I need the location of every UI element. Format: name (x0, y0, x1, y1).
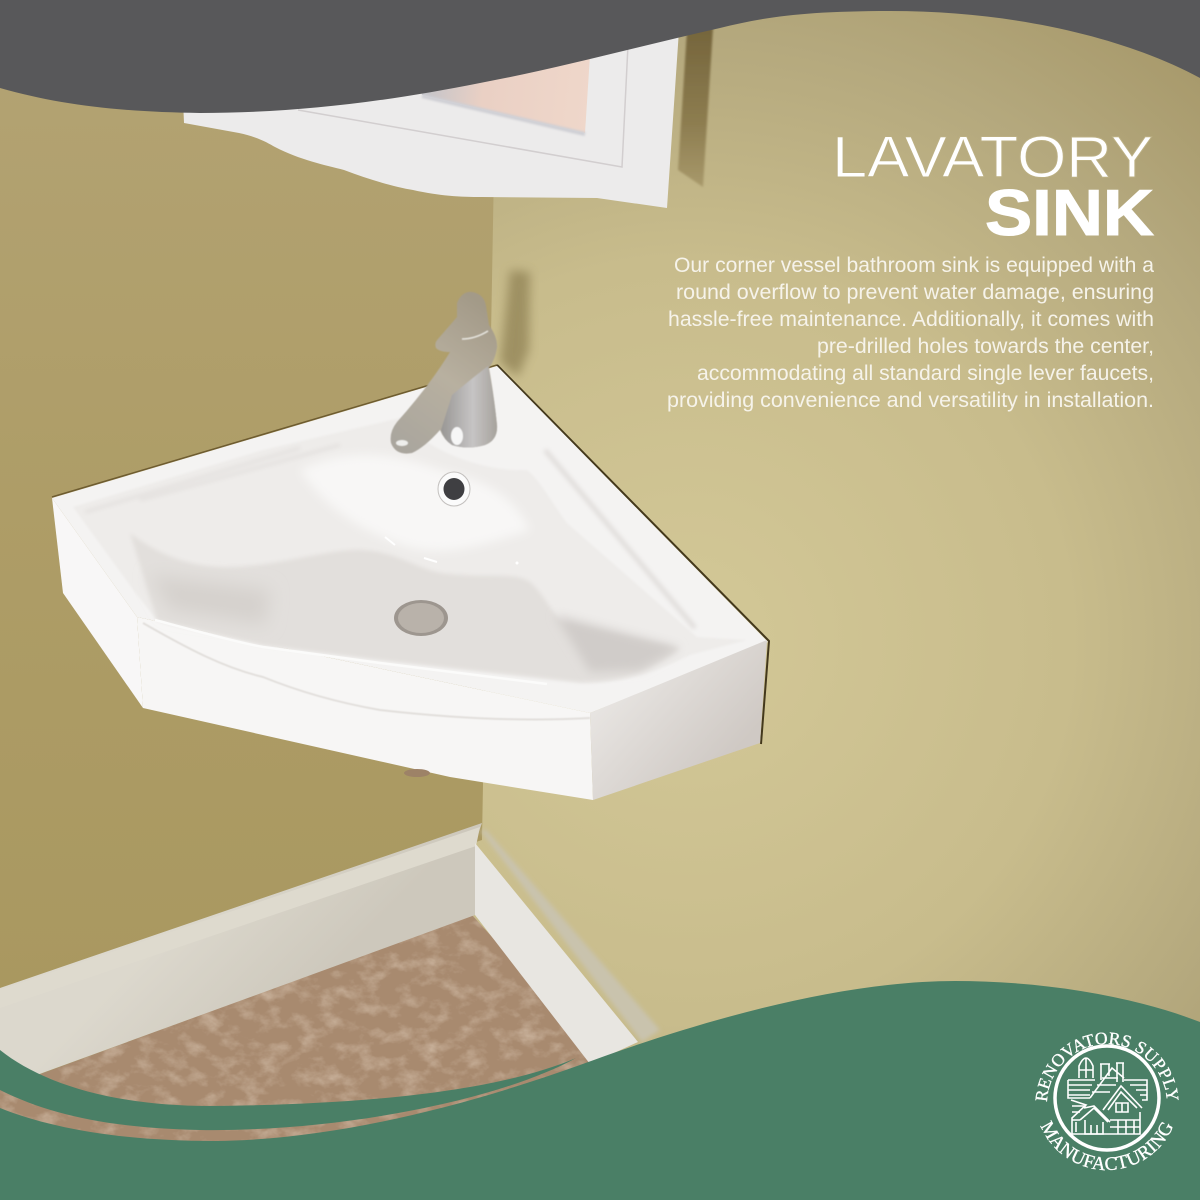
logo arc text top: RENOVATORS SUPPLY (1035, 1032, 1179, 1102)
description text: round overflow to prevent water damage, ensuring (676, 281, 1154, 304)
sink front face (137, 617, 593, 800)
description text: pre-drilled holes towards the center, (817, 335, 1154, 358)
photo: marble floor (0, 916, 588, 1141)
photo: faucet shadow on wall (500, 270, 530, 377)
green bottom banner (0, 981, 1200, 1200)
logo ring (1055, 1046, 1159, 1150)
faucet (391, 292, 497, 454)
description text: hassle-free maintenance. Additionally, it comes with (668, 308, 1154, 331)
photo: left wall (0, 0, 497, 1000)
title line: lavatory: LAVATORY (832, 125, 1153, 190)
drain pipe (404, 769, 430, 777)
logo house line art (1068, 1058, 1147, 1134)
photo: wall mirror frame (183, 28, 713, 208)
sink wall shadow line (52, 365, 769, 744)
description text: Our corner vessel bathroom sink is equipped with a (674, 254, 1154, 277)
sink right face (590, 640, 767, 800)
photo: baseboard (0, 823, 660, 1089)
logo: renovators supply manufacturing (1035, 1032, 1179, 1170)
overflow (438, 472, 470, 506)
title line: sink: SINK (985, 176, 1154, 249)
description text: providing convenience and versatility in installation. (667, 389, 1154, 412)
sink bowl (73, 418, 747, 720)
description text: accommodating all standard single lever faucets, (697, 362, 1154, 385)
grey top banner (0, 0, 1200, 113)
sink (52, 292, 769, 800)
sink rim (52, 366, 768, 713)
green sweep accent (0, 1050, 576, 1130)
title (832, 125, 1154, 249)
drain (394, 600, 448, 636)
sink left face (52, 498, 143, 708)
logo arc text bottom: MANUFACTURING (1040, 1120, 1172, 1170)
description text (667, 254, 1154, 412)
